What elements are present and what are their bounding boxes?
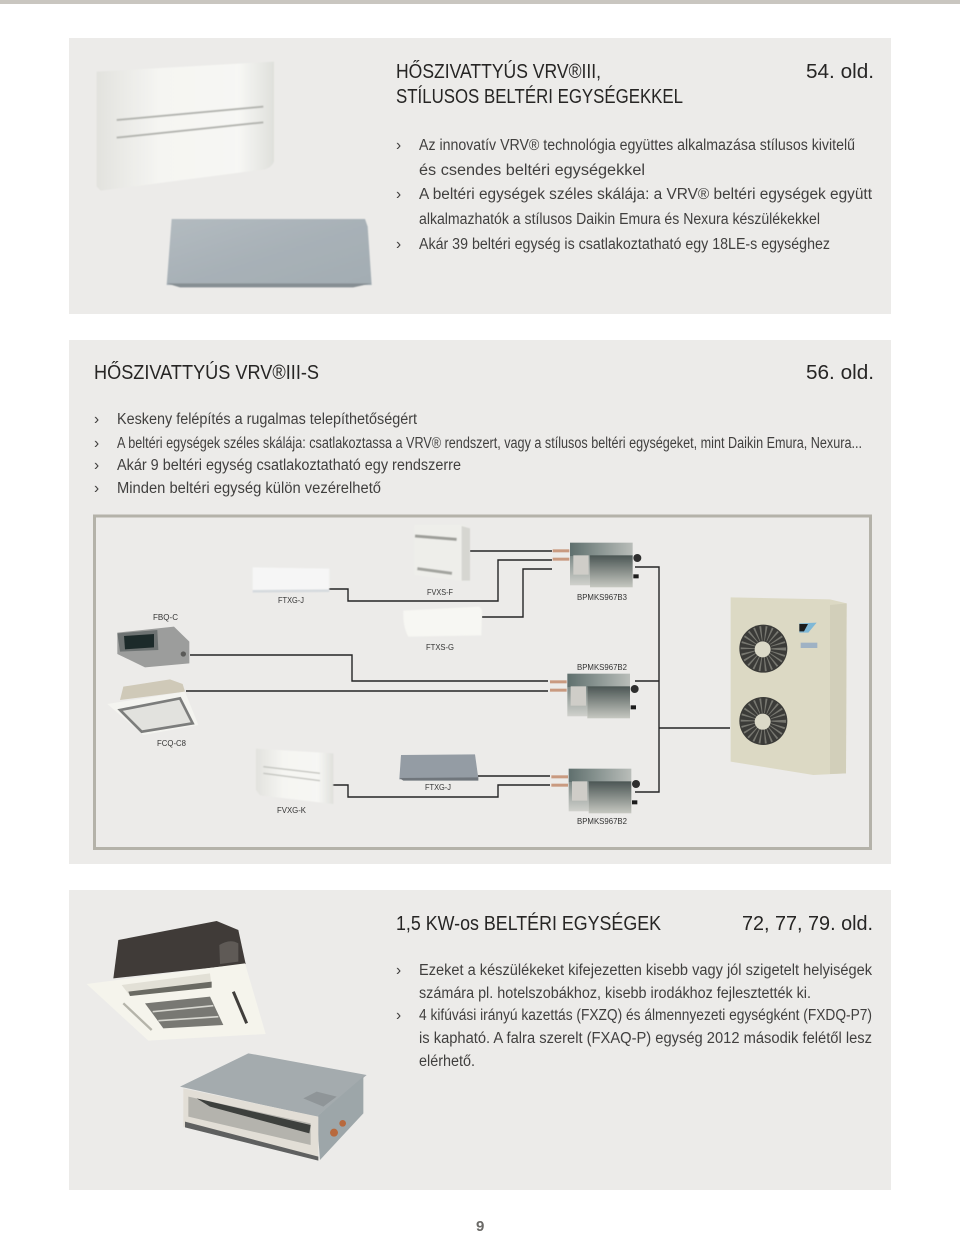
- bullet list: is kapható. A falra szerelt (FXAQ-P) egység 2012 második felétől lesz: [419, 1030, 872, 1047]
- bullet list: és csendes beltéri egységekkel: [419, 162, 645, 179]
- bullet list: Akár 39 beltéri egység is csatlakoztatható egy 18LE-s egységhez: [419, 236, 830, 253]
- bullet list: számára pl. hotelszobákhoz, kisebb irodákhoz fejlesztették ki.: [419, 985, 811, 1002]
- icon: BP unit B3: [553, 543, 641, 587]
- connection lines: [186, 551, 730, 797]
- icon: FTXG-J silver wall unit: [399, 754, 478, 781]
- icon: outdoor unit: [731, 597, 847, 775]
- bullet list: Minden beltéri egység külön vezérelhető: [117, 480, 381, 497]
- heading second line: STÍLUSOS BELTÉRI EGYSÉGEKKEL: [396, 85, 683, 108]
- bullet list: ›: [94, 457, 99, 474]
- heading: VRV III-S: HŐSZIVATTYÚS VRV®III-S: [94, 361, 319, 384]
- bullet list: ›: [396, 236, 401, 253]
- icon: FVXS-F floor unit: [414, 525, 470, 581]
- system diagram: [94, 516, 870, 848]
- bullet list: ›: [396, 186, 401, 203]
- bullet list: [396, 137, 873, 253]
- icon: concealed duct unit: [180, 1053, 367, 1161]
- labels: BPMKS967B2: [577, 816, 627, 826]
- panel: 1.5 kW indoor units: [69, 890, 891, 1190]
- bullet list: Az innovatív VRV® technológia együttes alkalmazása stílusos kivitelű: [419, 137, 855, 154]
- bullet list: elérhető.: [419, 1053, 475, 1070]
- page reference: 54. old.: [806, 61, 874, 83]
- icon: FCQ-C8 cassette: [107, 679, 198, 735]
- page reference: 72, 77, 79. old.: [742, 913, 873, 935]
- bullet list: Ezeket a készülékeket kifejezetten kisebb vagy jól szigetelt helyiségek: [419, 962, 872, 979]
- heading: 1.5 kW: 1,5 KW-os BELTÉRI EGYSÉGEK: [396, 912, 662, 935]
- bullet list: ›: [94, 435, 99, 452]
- labels: [153, 587, 627, 826]
- bullet list: ›: [396, 962, 401, 979]
- labels: FVXG-K: [277, 805, 306, 815]
- icon: BP unit B2 lower: [551, 769, 640, 813]
- heading: stylish units: HŐSZIVATTYÚS VRV®III,: [396, 60, 601, 83]
- bullet list: [94, 411, 862, 497]
- panel: VRV III-S: [69, 340, 891, 864]
- bullet list: [396, 962, 872, 1070]
- bullet list: ›: [396, 137, 401, 154]
- icon: 4-way cassette: [87, 921, 266, 1041]
- icon: FTXS-G wall unit: [403, 607, 482, 637]
- icon: FBQ-C duct unit: [117, 627, 189, 667]
- labels: FCQ-C8: [157, 738, 186, 748]
- bullet list: alkalmazhatók a stílusos Daikin Emura és Nexura készülékekkel: [419, 211, 820, 228]
- labels: FTXS-G: [426, 642, 454, 652]
- bullet list: ›: [94, 411, 99, 428]
- labels: FBQ-C: [153, 612, 178, 622]
- icon: BP unit B2 middle: [550, 674, 639, 718]
- icon: white floor unit: [97, 62, 274, 191]
- page reference: 56. old.: [806, 362, 874, 384]
- icon: FVXG-K floor unit: [256, 749, 333, 804]
- bullet list: Keskeny felépítés a rugalmas telepíthetőségért: [117, 411, 418, 428]
- labels: FTXG-J: [278, 595, 304, 605]
- labels: BPMKS967B2: [577, 662, 627, 672]
- icon: FTXG-J white wall unit: [253, 567, 329, 593]
- labels: FVXS-F: [427, 587, 453, 597]
- labels: BPMKS967B3: [577, 592, 627, 602]
- labels: FTXG-J: [425, 782, 451, 792]
- bullet list: Akár 9 beltéri egység csatlakoztatható egy rendszerre: [117, 457, 461, 474]
- icon: silver wall unit: [167, 219, 372, 287]
- bullet list: ›: [396, 1007, 401, 1024]
- top rule: [0, 0, 960, 4]
- bullet list: 4 kifúvási irányú kazettás (FXZQ) és álmennyezeti egységként (FXDQ-P7): [419, 1007, 872, 1024]
- bullet list: A beltéri egységek széles skálája: a VRV® beltéri egységek együtt: [419, 186, 873, 203]
- bullet list: ›: [94, 480, 99, 497]
- panel: stylish indoor units: [69, 38, 891, 314]
